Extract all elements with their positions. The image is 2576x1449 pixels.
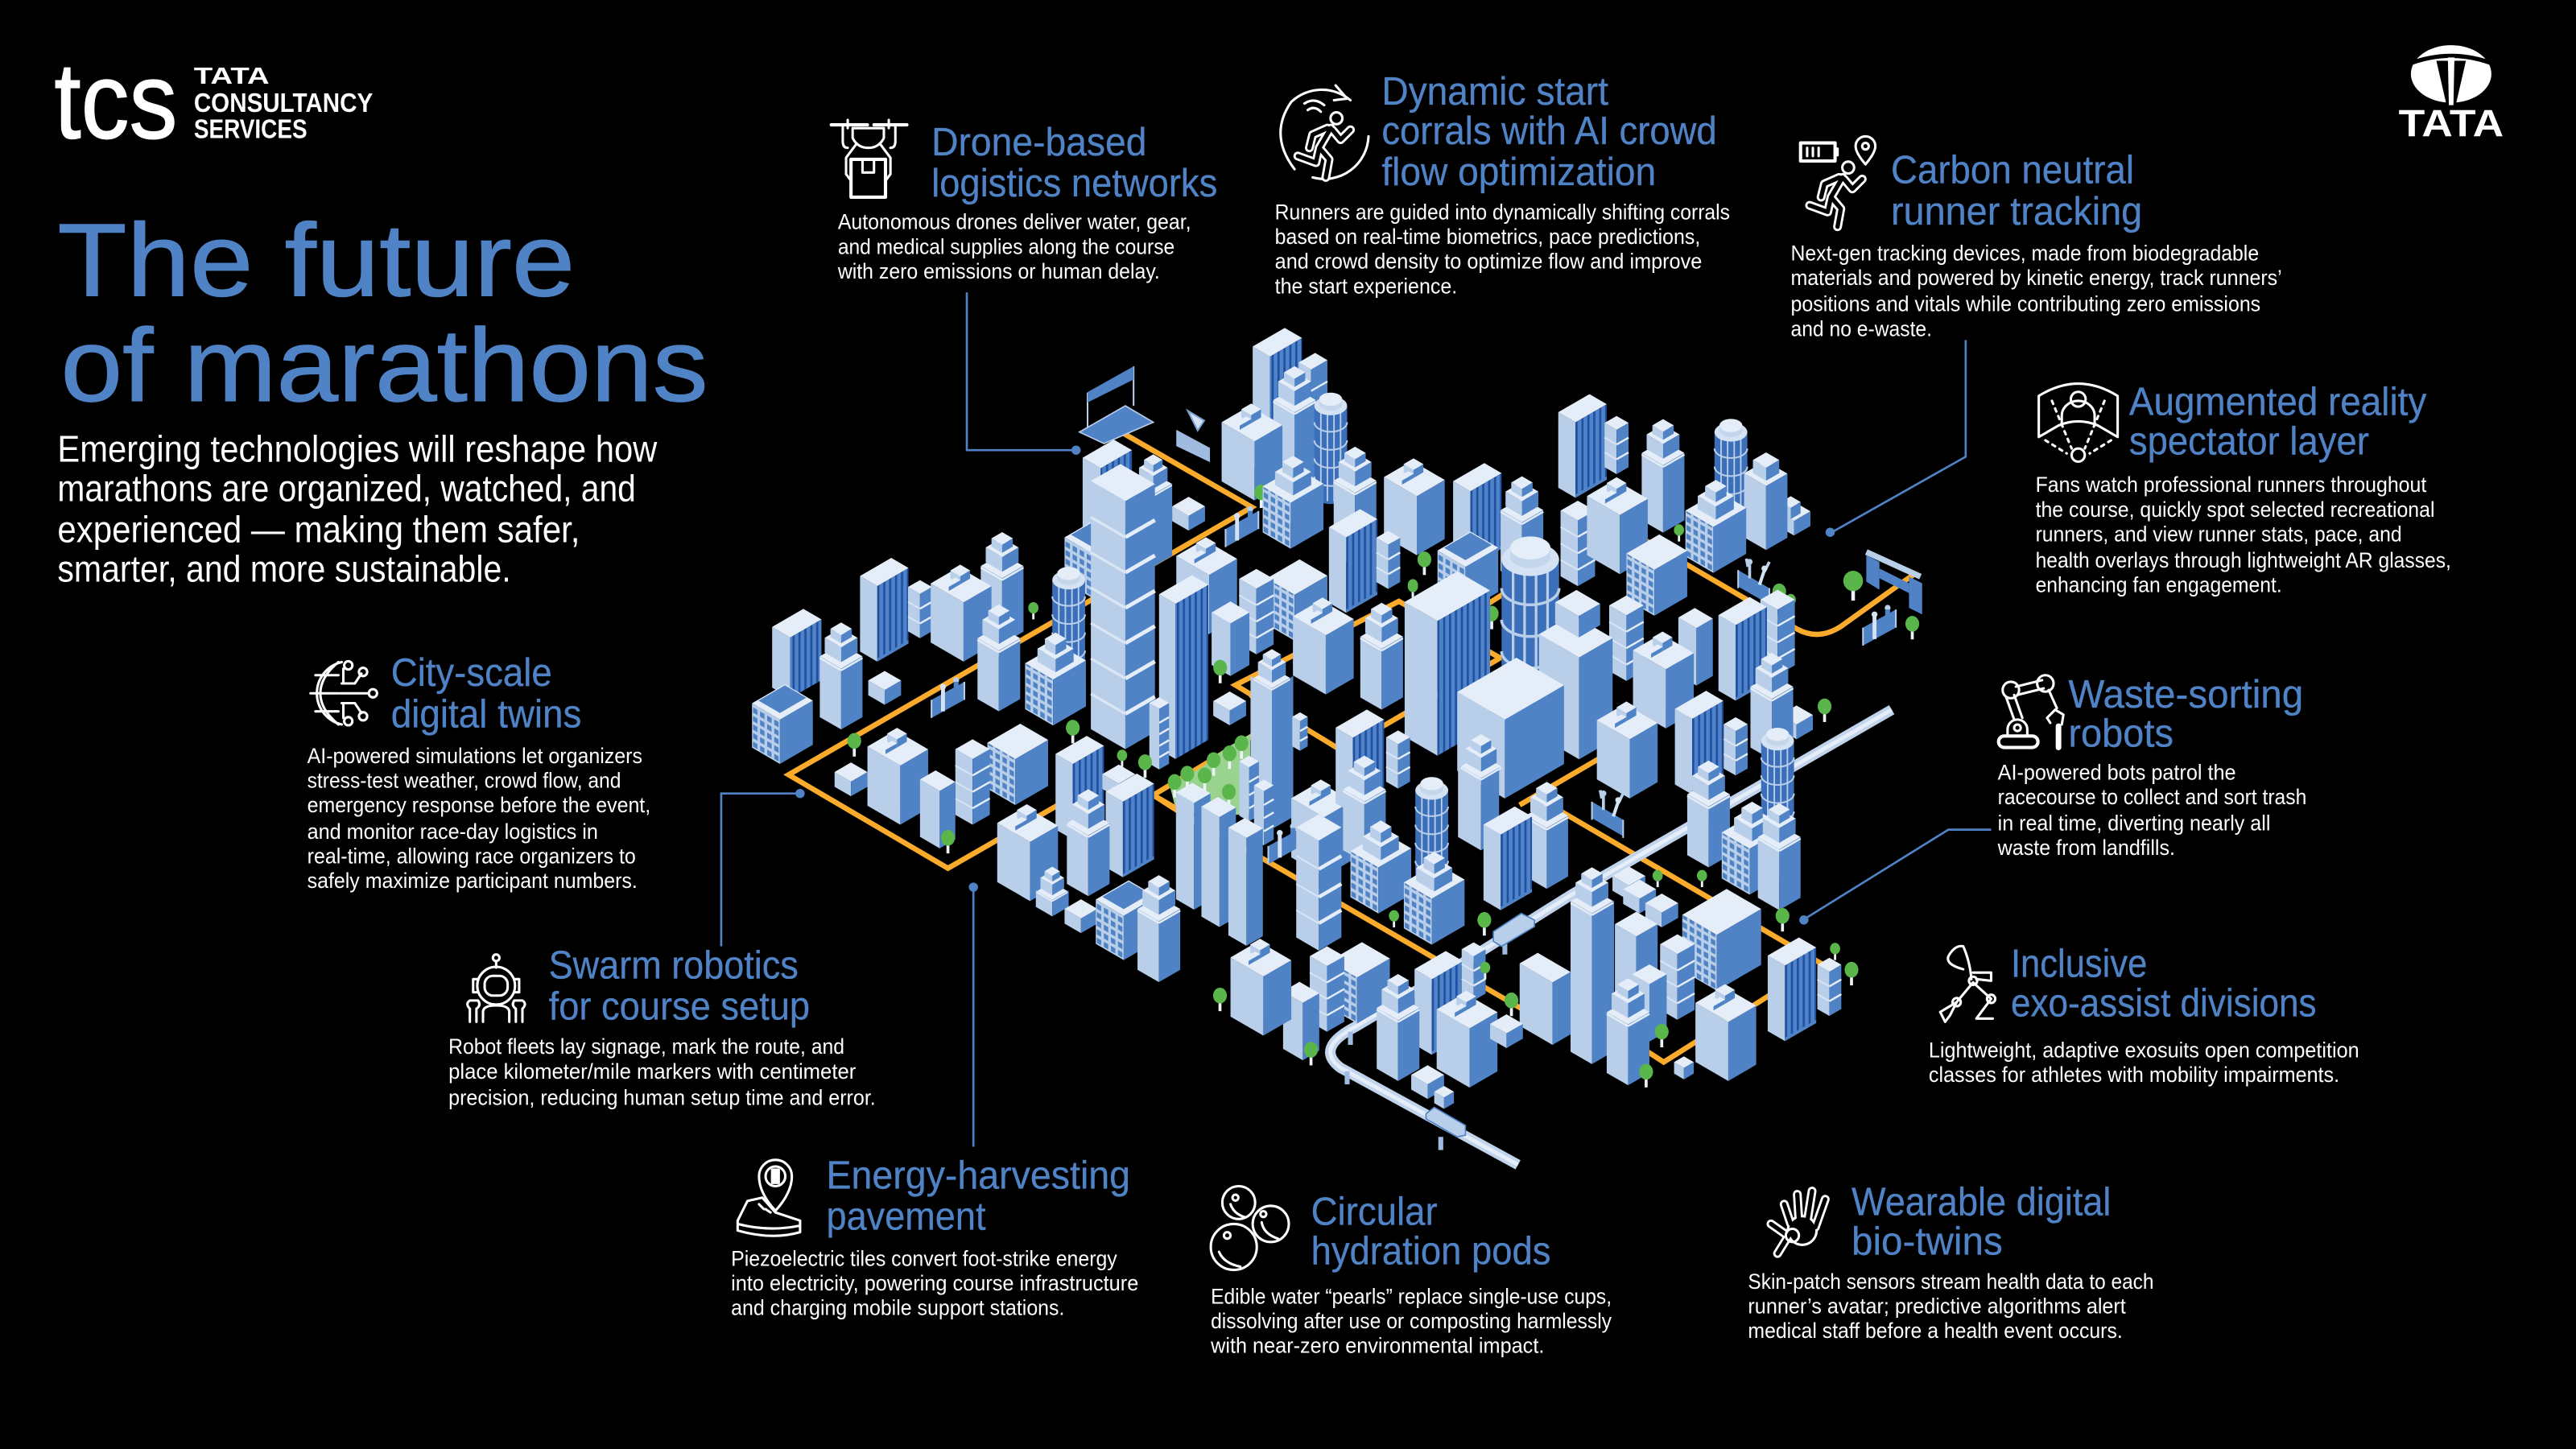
- panel: city-scale digital twins: City-scale: [391, 651, 552, 695]
- TCS logo: CONSULTANCY: [194, 89, 373, 118]
- panel: swarm robotics: for course setup: [549, 985, 810, 1029]
- Tata logo: [2399, 45, 2504, 144]
- title: The future: [57, 203, 575, 318]
- icon: exoskeleton legs: [1940, 946, 1996, 1022]
- panel: energy-harvesting pavement: into electricity, powering course infrastructure: [731, 1271, 1138, 1295]
- buildings: center lower block: [1269, 691, 1748, 951]
- buildings: bottom block: [1213, 939, 1523, 1109]
- panel: circular hydration pods: Circular: [1311, 1191, 1438, 1234]
- panel: energy-harvesting pavement: and charging mobile support stations.: [731, 1296, 1064, 1320]
- TCS logo: tcs: [54, 39, 177, 161]
- panel: inclusive exo-assist: Lightweight, adaptive exosuits open competition: [1929, 1038, 2359, 1062]
- panel: dynamic start corrals: and crowd density to optimize flow and improve: [1275, 250, 1702, 274]
- panel: city-scale digital twins: emergency response before the event,: [308, 793, 650, 817]
- panel: carbon neutral tracking: Carbon neutral: [1891, 149, 2134, 192]
- panel: augmented reality: Fans watch professional runners throughout: [2036, 473, 2427, 497]
- panel: city-scale digital twins: [308, 651, 650, 893]
- panel: dynamic start corrals: corrals with AI crowd: [1381, 109, 1717, 153]
- panel: energy-harvesting pavement: [731, 1154, 1138, 1320]
- panel: energy-harvesting pavement: Energy-harvesting: [827, 1154, 1130, 1198]
- connector: drone: [967, 292, 1080, 455]
- panel: swarm robotics: Robot fleets lay signage, mark the route, and: [448, 1034, 844, 1059]
- panel: dynamic start corrals: the start experience.: [1275, 274, 1457, 298]
- finish arch: [1866, 552, 1922, 614]
- panel: waste sorting robots: racecourse to collect and sort trash: [1998, 785, 2306, 809]
- panel: drone logistics: [832, 120, 1217, 283]
- icon: shoe and energy pin: [737, 1160, 800, 1236]
- icon: runner in circle: [1281, 85, 1368, 179]
- isometric city illustration: [752, 328, 1922, 1165]
- title: of marathons: [61, 308, 708, 423]
- intro paragraph: smarter, and more sustainable.: [57, 547, 511, 589]
- panel: augmented reality: spectator layer: [2129, 419, 2369, 463]
- start gantry: [1080, 366, 1154, 444]
- intro paragraph: [57, 427, 658, 589]
- panel: augmented reality: runners, and view runner stats, pace, and: [2036, 522, 2402, 546]
- panel: waste sorting robots: in real time, diverting nearly all: [1998, 811, 2270, 836]
- panel: circular hydration pods: Edible water “pearls” replace single-use cups,: [1211, 1284, 1612, 1308]
- panel: augmented reality: Augmented reality: [2129, 381, 2427, 424]
- monorail line: [1331, 710, 1892, 1165]
- panel: drone logistics: logistics networks: [931, 162, 1217, 205]
- panel: wearable bio-twins: Wearable digital: [1852, 1180, 2111, 1224]
- panel: augmented reality: enhancing fan engagement.: [2036, 573, 2282, 597]
- panel: carbon neutral tracking: Next-gen tracking devices, made from biodegradable: [1790, 241, 2259, 265]
- icon: runner with battery and pin: [1801, 136, 1876, 227]
- panel: inclusive exo-assist: [1929, 942, 2359, 1087]
- Tata logo: TATA: [2399, 102, 2504, 144]
- buildings: upper left cluster: [1064, 440, 1258, 634]
- panel: circular hydration pods: with near-zero environmental impact.: [1210, 1334, 1544, 1358]
- icon: robot: [468, 955, 525, 1022]
- panel: waste sorting robots: [1997, 673, 2306, 860]
- buildings: lower left block: [835, 720, 1274, 982]
- buildings: upper right-center row: [1329, 463, 1687, 731]
- park with trees: [1168, 734, 1250, 818]
- panel: swarm robotics: [448, 944, 876, 1109]
- panel: carbon neutral tracking: materials and powered by kinetic energy, track runners’: [1790, 266, 2282, 290]
- spectators and trees near finish: [1738, 559, 1919, 646]
- title: [57, 203, 708, 423]
- panel: carbon neutral tracking: positions and vitals while contributing zero emissions: [1790, 292, 2260, 316]
- panel: wearable bio-twins: medical staff before a health event occurs.: [1748, 1319, 2123, 1343]
- panel: city-scale digital twins: safely maximize participant numbers.: [308, 869, 638, 893]
- panel: inclusive exo-assist: exo-assist divisions: [2011, 981, 2317, 1025]
- buildings: center striped and small blocks: [1150, 575, 1307, 829]
- intro paragraph: Emerging technologies will reshape how: [57, 427, 658, 469]
- icon: AR spectator: [2039, 384, 2118, 461]
- panel: city-scale digital twins: stress-test weather, crowd flow, and: [308, 769, 621, 793]
- panel: augmented reality: [2036, 381, 2451, 597]
- panel: dynamic start corrals: Runners are guided into dynamically shifting corrals: [1275, 200, 1730, 224]
- panel: city-scale digital twins: digital twins: [391, 692, 581, 736]
- icon: robotic arm: [1999, 675, 2063, 748]
- panel: waste sorting robots: Waste-sorting: [2068, 673, 2303, 716]
- panel: wearable bio-twins: [1748, 1180, 2154, 1343]
- panel: inclusive exo-assist: Inclusive: [2011, 942, 2147, 985]
- panel: city-scale digital twins: and monitor race-day logistics in: [308, 819, 598, 844]
- tiered tower: [1091, 464, 1155, 749]
- marathon route: [789, 422, 1916, 1062]
- icon: hand with patch: [1771, 1191, 1825, 1253]
- panel: augmented reality: health overlays through lightweight AR glasses,: [2036, 548, 2451, 572]
- panel: dynamic start corrals: based on real-time biometrics, pace predictions,: [1275, 225, 1700, 249]
- icon: drone: [832, 120, 907, 197]
- panel: waste sorting robots: AI-powered bots patrol the: [1998, 760, 2236, 784]
- panel: dynamic start corrals: flow optimization: [1381, 151, 1656, 194]
- drone and sign: [1176, 411, 1210, 462]
- connector: carbon tracking: [1826, 340, 1966, 537]
- TCS logo: SERVICES: [194, 114, 308, 144]
- big central towers: [1405, 572, 1794, 799]
- monorail trains: [1426, 914, 1534, 1137]
- connector: waste robots: [1799, 830, 1991, 925]
- panel: city-scale digital twins: real-time, allowing race organizers to: [308, 844, 636, 868]
- connector: swarm robotics: [721, 789, 805, 947]
- connector: energy pavement: [968, 882, 978, 1146]
- panel: energy-harvesting pavement: Piezoelectric tiles convert foot-strike energy: [731, 1246, 1117, 1270]
- panel: dynamic start corrals: [1275, 70, 1730, 298]
- panel: wearable bio-twins: bio-twins: [1852, 1220, 2003, 1263]
- panel: circular hydration pods: dissolving after use or composting harmlessly: [1211, 1309, 1612, 1333]
- panel: drone logistics: Autonomous drones deliver water, gear,: [838, 210, 1191, 234]
- panel: drone logistics: with zero emissions or human delay.: [837, 259, 1160, 283]
- panel: circular hydration pods: hydration pods: [1311, 1230, 1551, 1274]
- panel: circular hydration pods: [1210, 1186, 1612, 1358]
- buildings: left cluster: [752, 532, 1086, 764]
- icon: water pearls: [1211, 1186, 1289, 1270]
- panel: drone logistics: Drone-based: [931, 121, 1146, 164]
- buildings: upper center cluster: [1222, 328, 1810, 573]
- panel: carbon neutral tracking: runner tracking: [1891, 190, 2142, 233]
- icon: digital globe: [311, 661, 377, 725]
- intro paragraph: marathons are organized, watched, and: [57, 467, 636, 509]
- panel: city-scale digital twins: AI-powered simulations let organizers: [308, 744, 642, 768]
- panel: wearable bio-twins: Skin-patch sensors stream health data to each: [1748, 1269, 2154, 1294]
- panel: drone logistics: and medical supplies along the course: [838, 234, 1174, 258]
- panel: carbon neutral tracking: [1790, 136, 2282, 341]
- panel: dynamic start corrals: Dynamic start: [1381, 70, 1608, 114]
- panel: inclusive exo-assist: classes for athletes with mobility impairments.: [1929, 1063, 2339, 1087]
- panel: waste sorting robots: robots: [2068, 712, 2174, 756]
- panel: swarm robotics: place kilometer/mile markers with centimeter: [448, 1059, 856, 1084]
- panel: energy-harvesting pavement: pavement: [827, 1195, 986, 1239]
- buildings: central right mid row: [1212, 559, 1831, 739]
- panel: carbon neutral tracking: and no e-waste.: [1790, 316, 1932, 341]
- TCS logo: [54, 39, 373, 161]
- intro paragraph: experienced — making them safer,: [57, 508, 580, 550]
- panel: swarm robotics: Swarm robotics: [549, 944, 799, 988]
- panel: augmented reality: the course, quickly spot selected recreational: [2036, 497, 2434, 522]
- buildings: right lower block: [1520, 728, 1859, 1088]
- TCS logo: TATA: [194, 64, 270, 89]
- panel: waste sorting robots: waste from landfills.: [1997, 836, 2175, 860]
- panel: wearable bio-twins: runner’s avatar; predictive algorithms alert: [1748, 1294, 2126, 1319]
- panel: swarm robotics: precision, reducing human setup time and error.: [448, 1085, 876, 1109]
